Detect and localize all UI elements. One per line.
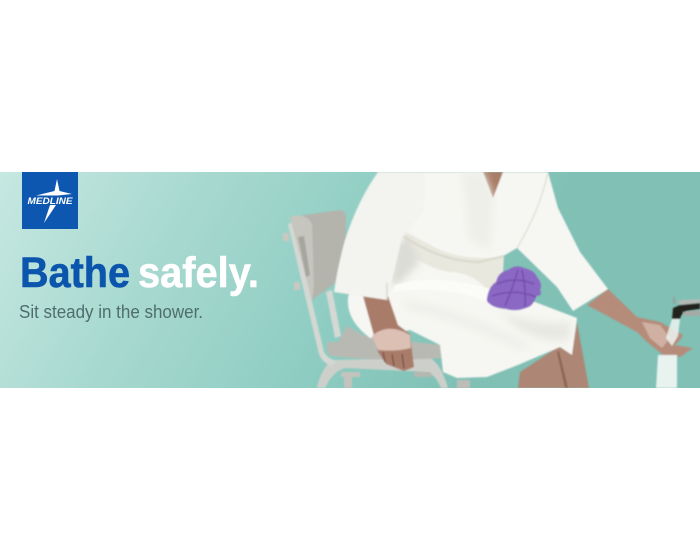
banner illustration [0,172,700,388]
subheading: Sit steady in the shower. [19,302,203,322]
heading: Bathe [20,249,130,297]
right arm and hand [587,289,693,357]
legs [518,322,589,388]
heading: safely. [138,249,259,297]
left sleeve [333,172,404,301]
faucet [672,297,700,319]
logo: Medline [22,172,78,229]
heading [20,249,259,297]
left arm and hand [363,296,414,371]
background panel [0,172,700,388]
purple loofah [487,266,541,310]
shower chair [283,210,470,388]
right sleeve [517,172,608,311]
logo: Medline: MEDLINE [28,196,74,206]
water stream [656,319,680,388]
robe skirt and torso [348,172,577,378]
